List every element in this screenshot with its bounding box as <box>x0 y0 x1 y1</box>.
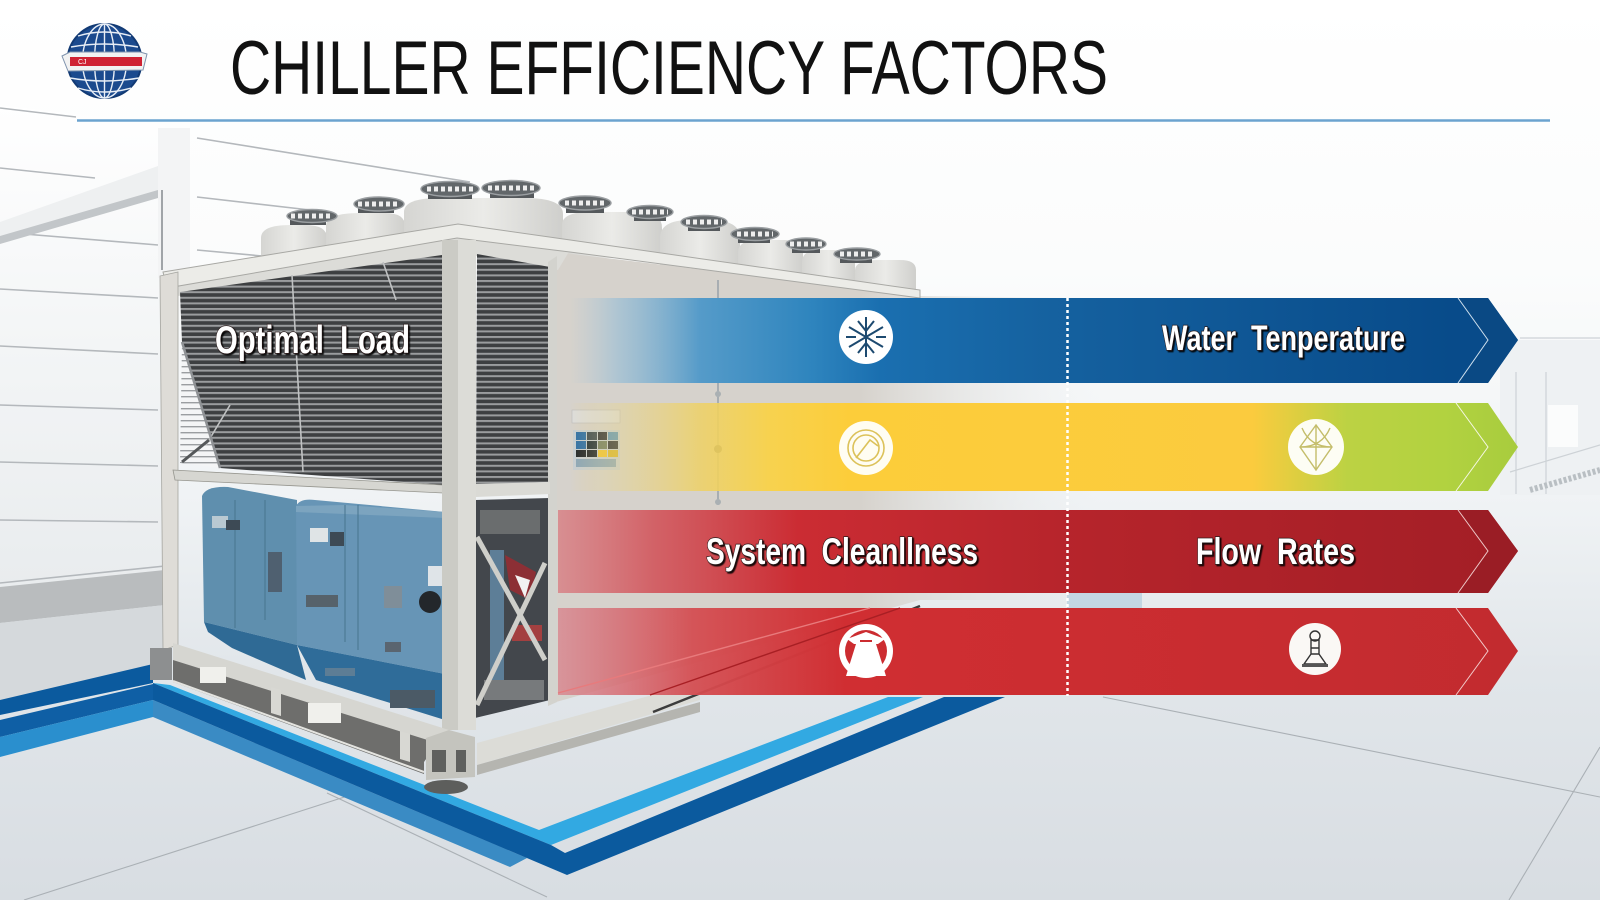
icon: snowflake <box>839 310 893 364</box>
faint building at right <box>1500 338 1600 495</box>
gap tint between rows 3 and 4 <box>1067 593 1142 608</box>
logo: globe with red banner <box>62 24 147 98</box>
label: Flow Rates: Flow Rates <box>1196 531 1355 572</box>
header divider line <box>77 119 1550 122</box>
arrow bar: row 4 red <box>558 608 1518 695</box>
arrow bar: row 2 yellow to green <box>570 403 1518 491</box>
arrow bar: row 3 dark red <box>558 510 1518 593</box>
label: Optimal Load: Optimal Load <box>215 319 410 362</box>
blue floor stripes <box>0 664 1005 875</box>
arrow bar: row 1 blue <box>570 298 1518 383</box>
logo: globe with red banner: CJ <box>78 59 87 66</box>
icon: gate <box>839 624 893 678</box>
front coil <box>180 255 443 485</box>
fans on top of chiller <box>261 180 916 294</box>
icon: gem globe <box>1288 419 1344 475</box>
icon: gauge ring <box>839 421 893 475</box>
icon: bollard <box>1289 623 1341 675</box>
label: Water Tenperature: Water Tenperature <box>1162 319 1405 358</box>
interior compartment <box>475 498 550 718</box>
wall at left <box>0 105 470 705</box>
control label on side panel <box>572 410 620 470</box>
roof of chiller <box>163 224 920 298</box>
label: System Cleanllness: System Cleanllness <box>706 531 978 572</box>
dotted vertical divider <box>1066 298 1069 696</box>
side panel <box>556 252 1100 702</box>
steel frame and base <box>150 240 920 794</box>
blue compressor units <box>202 487 445 720</box>
corner coil <box>476 254 550 485</box>
title: CHILLER EFFICIENCY FACTORS <box>230 26 1108 111</box>
frame band under roof <box>165 236 570 296</box>
chiller unit <box>150 180 1100 794</box>
